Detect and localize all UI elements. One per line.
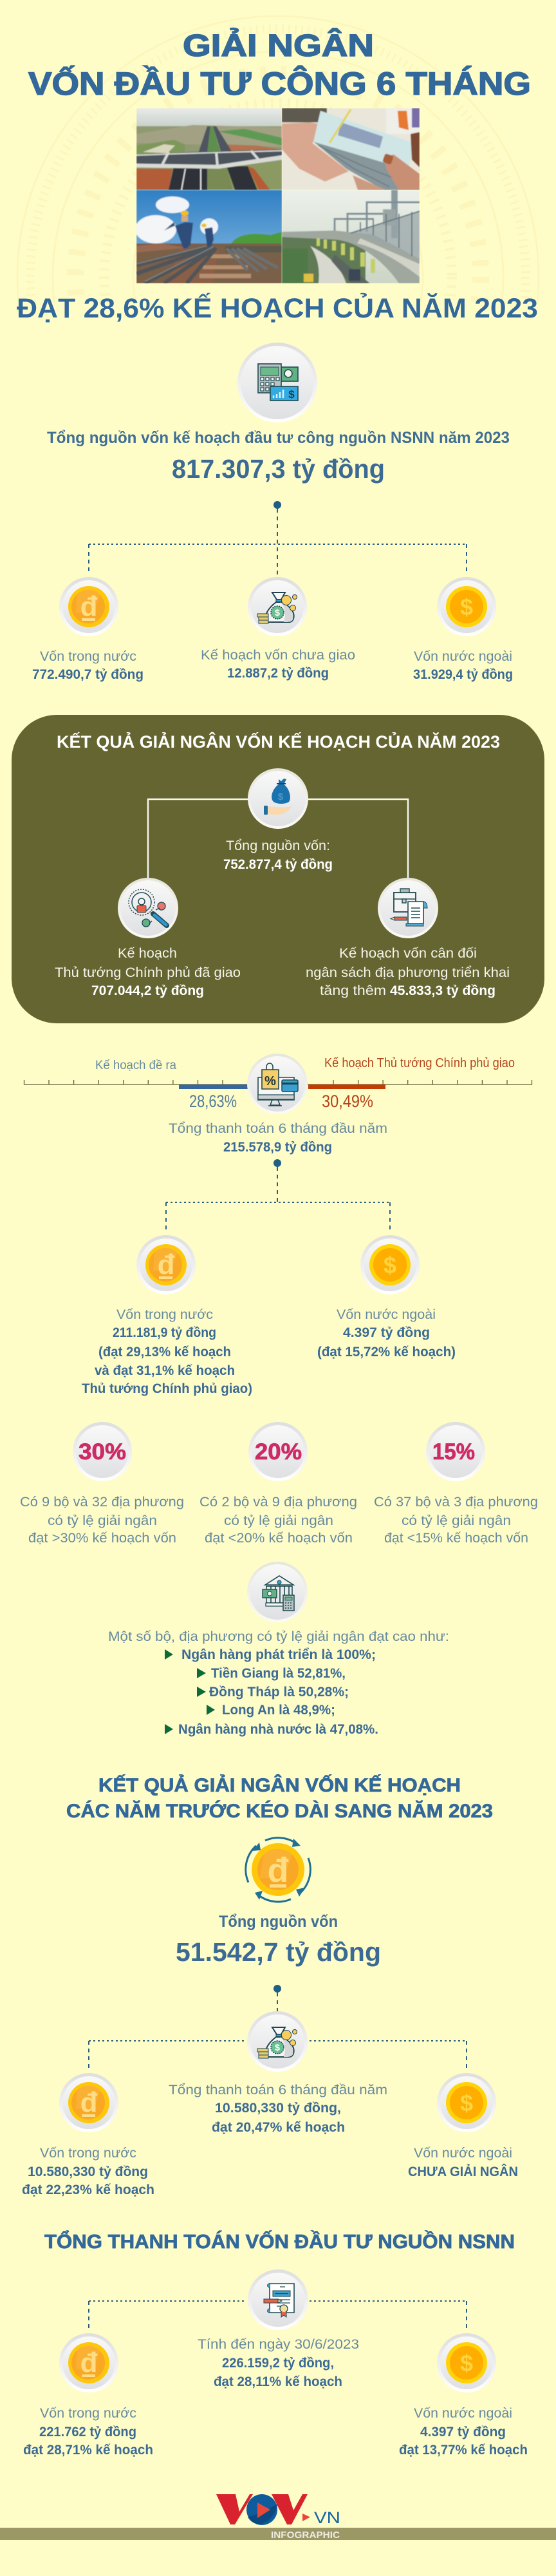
text: domestic payment: 211.181,9 tỷ đồng [113,1325,216,1340]
text: domestic payment: (đạt 29,13% kế hoạch [98,1345,231,1359]
text: six-month payment: Tổng thanh toán 6 tháng đầu năm [169,1121,387,1136]
text: domestic payment: Thủ tướng Chính phủ giao) [82,1381,252,1396]
text: six-month payment [169,1121,387,1155]
text: below 20%: có tỷ lệ giải ngân [224,1513,333,1528]
text: domestic payment [82,1307,252,1396]
text: foreign payment [317,1307,456,1359]
text: foreign payment: Vốn nước ngoài [337,1307,436,1322]
text: high disbursement list: Một số bộ, địa phương có tỷ lệ giải ngân đạt cao như: [108,1629,449,1644]
text: domestic capital: Vốn trong nước [40,649,136,664]
badge: 20% [248,1422,308,1481]
text: foreign capital [413,649,513,682]
text: as of date: đạt 28,11% kế hoạch [214,2374,342,2389]
icon: shopping percent [247,1054,308,1114]
text: local budget plan: 45.833,3 tỷ đồng [390,983,496,998]
badge: 30% [73,1422,132,1481]
text: unassigned capital [201,648,355,681]
text: prior domestic [22,2146,154,2197]
badge: 20%: 20% [255,1439,302,1464]
heading: prior-year plans [66,1774,493,1822]
footer bar [0,2528,556,2540]
text: prior payment [169,2083,387,2135]
text: total foreign: 4.397 tỷ đồng [420,2425,506,2439]
list item: Tien Giang: Tiền Giang là 52,81%, [211,1666,346,1681]
text: total capital: Tổng nguồn vốn: [226,838,330,853]
list item: Dong Thap: Đồng Tháp là 50,28%; [209,1685,349,1700]
text: PM assigned plan: 707.044,2 tỷ đồng [91,983,204,998]
text: below 20%: Có 2 bộ và 9 địa phương [199,1495,357,1510]
text: local budget plan: tăng thêm [320,983,386,998]
icon: money bag [247,2011,308,2072]
badge: 30%: 30% [79,1439,126,1464]
text: PM assigned plan: Kế hoạch [118,946,177,961]
text: domestic payment: và đạt 31,1% kế hoạch [95,1363,235,1378]
text: total foreign [399,2406,528,2458]
title: VỐN ĐẦU TƯ CÔNG 6 THÁNG [28,65,531,102]
connector: payment split [166,1159,390,1233]
heading: total payment: TỔNG THANH TOÁN VỐN ĐẦU TƯ NGUỒN NSNN [44,2230,515,2253]
icon: bank [247,1562,308,1622]
total plan label: Tổng nguồn vốn kế hoạch đầu tư công nguồn NSNN năm 2023 [47,429,510,447]
ruler label: PM plan: Kế hoạch Thủ tướng Chính phủ giao [324,1056,515,1070]
text: total domestic: Vốn trong nước [40,2406,136,2421]
icon: dollar coin [437,2333,496,2392]
text: prior domestic: Vốn trong nước [40,2146,136,2161]
text: below 15%: đạt <15% kế hoạch vốn [384,1531,528,1546]
text: above 30%: Có 9 bộ và 32 địa phương [20,1495,184,1510]
text: PM assigned plan [55,946,241,998]
text: total capital [223,838,333,872]
subtitle: ĐẠT 28,6% KẾ HOẠCH CỦA NĂM 2023 [17,292,538,324]
photo: hands with banknotes [282,108,420,190]
text: below 15%: Có 37 bộ và 3 địa phương [374,1495,538,1510]
text: unassigned capital: 12.887,2 tỷ đồng [227,666,329,681]
text: foreign payment: (đạt 15,72% kế hoạch) [317,1345,456,1359]
text: foreign payment: 4.397 tỷ đồng [343,1325,430,1340]
text: prior foreign: Vốn nước ngoài [414,2146,512,2161]
text: below 20%: đạt <20% kế hoạch vốn [205,1531,353,1546]
logo: VOV.VN: VN [314,2509,340,2527]
icon: dong coin [59,2073,118,2132]
title [28,28,531,102]
text: prior payment: Tổng thanh toán 6 tháng đầu năm [169,2083,387,2098]
icon: dollar coin [437,577,496,636]
text: local budget plan [306,946,510,998]
connector lines [148,799,408,878]
chart: disbursement ruler [24,1054,532,1114]
text: prior domestic: 10.580,330 tỷ đồng [28,2164,148,2179]
icon: dong coin [59,2333,118,2392]
text: PM assigned plan: Thủ tướng Chính phủ đã giao [55,965,241,980]
text: total foreign: Vốn nước ngoài [414,2406,512,2421]
icon: briefcase and receipt [378,878,438,938]
text: prior foreign [408,2146,518,2179]
text: unassigned capital: Kế hoạch vốn chưa giao [201,648,355,663]
text: above 30%: có tỷ lệ giải ngân [48,1513,157,1528]
text: as of date: Tính đến ngày 30/6/2023 [198,2337,359,2352]
value: total prior capital: 51.542,7 tỷ đồng [176,1937,381,1967]
text: below 20% [199,1495,357,1546]
icon: money bag [248,577,307,636]
text: prior payment: 10.580,330 tỷ đồng, [215,2101,341,2116]
title: GIẢI NGÂN [183,28,374,63]
text: prior payment: đạt 20,47% kế hoạch [212,2120,345,2135]
text: local budget plan: ngân sách địa phương triển khai [306,965,510,980]
text: total capital: 752.877,4 tỷ đồng [223,857,333,872]
bar: 30.49% [308,1084,385,1089]
icon: hand holding money bag: $ [278,791,284,802]
photo: expressway interchange [136,108,282,190]
heading: prior-year plans: CÁC NĂM TRƯỚC KÉO DÀI SANG NĂM 2023 [66,1800,493,1822]
badge: 15% [426,1422,485,1481]
text: total domestic [23,2406,153,2458]
text: prior foreign: CHƯA GIẢI NGÂN [408,2164,518,2179]
panel: 2023 plan results [12,715,544,1023]
icon: dollar coin [437,2073,496,2132]
photo: elevated metro line [282,190,420,283]
icon: shopping percent: % [264,1074,276,1088]
text: below 15% [374,1495,538,1546]
text: total domestic: 221.762 tỷ đồng [39,2425,136,2439]
text: domestic capital [32,649,144,682]
icon: hand holding money bag [248,768,308,829]
total plan value: 817.307,3 tỷ đồng [172,454,385,484]
value: 28.63%: 28,63% [189,1092,237,1111]
heading: prior-year plans: KẾT QUẢ GIẢI NGÂN VỐN KẾ HOẠCH [98,1774,461,1796]
connector: total payment split [89,2300,467,2302]
text: above 30%: đạt >30% kế hoạch vốn [28,1531,176,1546]
value: 30.49%: 30,49% [322,1092,373,1111]
text: as of date: 226.159,2 tỷ đồng, [222,2356,334,2371]
icon: certificate document [248,2269,308,2330]
text: total prior capital: Tổng nguồn vốn [219,1913,338,1931]
photo: rail workers [135,190,282,283]
text: prior domestic: đạt 22,23% kế hoạch [22,2183,154,2197]
connector: prior plan split [89,1985,467,2071]
text: foreign capital: Vốn nước ngoài [414,649,512,664]
text: six-month payment: 215.578,9 tỷ đồng [223,1140,332,1155]
badge: 15%: 15% [432,1439,475,1464]
text: total domestic: đạt 28,71% kế hoạch [23,2443,153,2458]
text: as of date [198,2337,359,2389]
text: high disbursement list [108,1629,449,1737]
icon: magnifier analysis [118,878,178,938]
photo collage [135,108,420,283]
text: above 30% [20,1495,184,1546]
footer label: infographic: INFOGRAPHIC [271,2530,340,2541]
icon: coin with cycle arrows [246,1838,310,1902]
ruler label: set plan: Kế hoạch đề ra [95,1059,176,1072]
panel heading: KẾT QUẢ GIẢI NGÂN VỐN KẾ HOẠCH CỦA NĂM 2023 [57,731,500,752]
icon: coin with cycle arrows: đ [268,1851,288,1889]
text: domestic payment: Vốn trong nước [116,1307,213,1322]
connector: branches [89,2301,467,2331]
text: domestic capital: 772.490,7 tỷ đồng [32,667,144,682]
connector: plan split [89,501,467,574]
list item: development bank: Ngân hàng phát triển là 100%; [181,1647,376,1662]
text: foreign capital: 31.929,4 tỷ đồng [413,667,513,682]
text: local budget plan: Kế hoạch vốn cân đối [339,946,477,961]
list item: state bank: Ngân hàng nhà nước là 47,08%. [178,1722,378,1737]
text: total foreign: đạt 13,77% kế hoạch [399,2443,528,2458]
bar: 28.63% [179,1084,248,1089]
icon: dong coin [136,1235,196,1294]
icon: dollar coin [360,1235,420,1294]
watermark: national emblem [17,15,539,303]
logo: VOV.VN [216,2494,340,2527]
icon: calculator and money: $ [288,388,295,401]
list item: Long An: Long An là 48,9%; [222,1703,335,1718]
icon: dong coin [59,577,118,636]
text: below 15%: có tỷ lệ giải ngân [402,1513,511,1528]
icon: calculator and money [237,343,317,422]
